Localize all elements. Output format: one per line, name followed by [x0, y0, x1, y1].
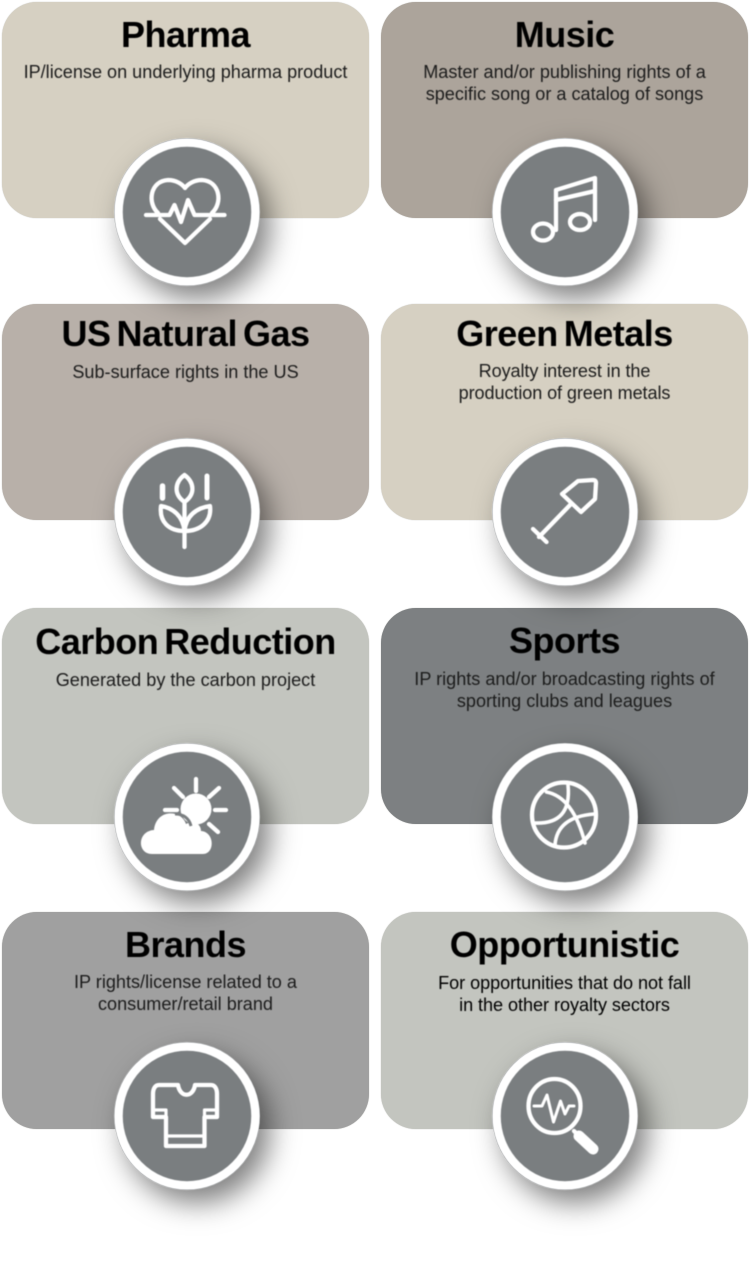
- panel: Music: [380, 2, 748, 318]
- text: Sports description: sporting clubs and leagues: [457, 691, 672, 711]
- text: Opportunistic description: For opportunities that do not fall: [438, 973, 691, 993]
- icon: music notes: [492, 138, 638, 286]
- text: Carbon Reduction description: Generated by the carbon project: [56, 670, 315, 690]
- panel: Carbon Reduction: [2, 608, 370, 920]
- text: US Natural Gas description: Sub-surface rights in the US: [72, 362, 299, 382]
- icon: shovel: [492, 438, 638, 586]
- panel: Green Metals: [380, 304, 748, 614]
- heading: US Natural Gas: US Natural Gas: [61, 313, 310, 354]
- card background: Carbon Reduction: [2, 608, 369, 824]
- text: Sports description: [414, 669, 716, 712]
- icon: magnifier with pulse: [492, 1042, 638, 1190]
- text: Green Metals description: production of green metals: [459, 383, 670, 403]
- panel: Brands: [2, 912, 370, 1222]
- text: Opportunistic description: [438, 973, 691, 1016]
- heading: Opportunistic: Opportunistic: [450, 924, 679, 965]
- text: Brands description: IP rights/license related to a: [74, 972, 297, 992]
- panel: Sports: [380, 608, 748, 922]
- icon: sun and cloud: [114, 743, 260, 891]
- text: Music description: [423, 62, 706, 105]
- text: Music description: specific song or a catalog of songs: [426, 84, 703, 104]
- text: Pharma description: IP/license on underlying pharma product: [24, 62, 347, 82]
- card background: Music: [381, 2, 748, 218]
- icon: basketball: [492, 743, 638, 891]
- text: Green Metals description: [459, 361, 670, 404]
- text: Green Metals description: Royalty interest in the: [479, 361, 650, 381]
- heading: Brands: Brands: [125, 924, 246, 965]
- panel: Pharma: [2, 2, 370, 316]
- text: Opportunistic description: in the other royalty sectors: [459, 995, 670, 1015]
- heading: Green Metals: Green Metals: [456, 313, 673, 354]
- card background: Opportunistic: [381, 912, 748, 1129]
- heading: Pharma: Pharma: [121, 14, 250, 55]
- card background: Sports: [381, 608, 748, 824]
- panel: US Natural Gas: [2, 304, 370, 617]
- card background: Brands: [2, 912, 369, 1129]
- text: Brands description: consumer/retail brand: [98, 994, 273, 1014]
- text: Sports description: IP rights and/or broadcasting rights of: [414, 669, 715, 689]
- card background: Pharma: [2, 2, 369, 218]
- text: Brands description: [74, 972, 298, 1014]
- icon: t-shirt: [114, 1042, 260, 1190]
- card background: Green Metals: [381, 304, 748, 520]
- icon: heart with pulse: [114, 138, 260, 286]
- heading: Sports: Sports: [509, 620, 620, 661]
- heading: Music: Music: [515, 14, 614, 55]
- icon: wheat plant: [114, 438, 260, 586]
- heading: Carbon Reduction: Carbon Reduction: [35, 621, 336, 662]
- panel: Opportunistic: [380, 912, 748, 1222]
- card background: US Natural Gas: [2, 304, 369, 520]
- text: Music description: Master and/or publishing rights of a: [423, 62, 706, 82]
